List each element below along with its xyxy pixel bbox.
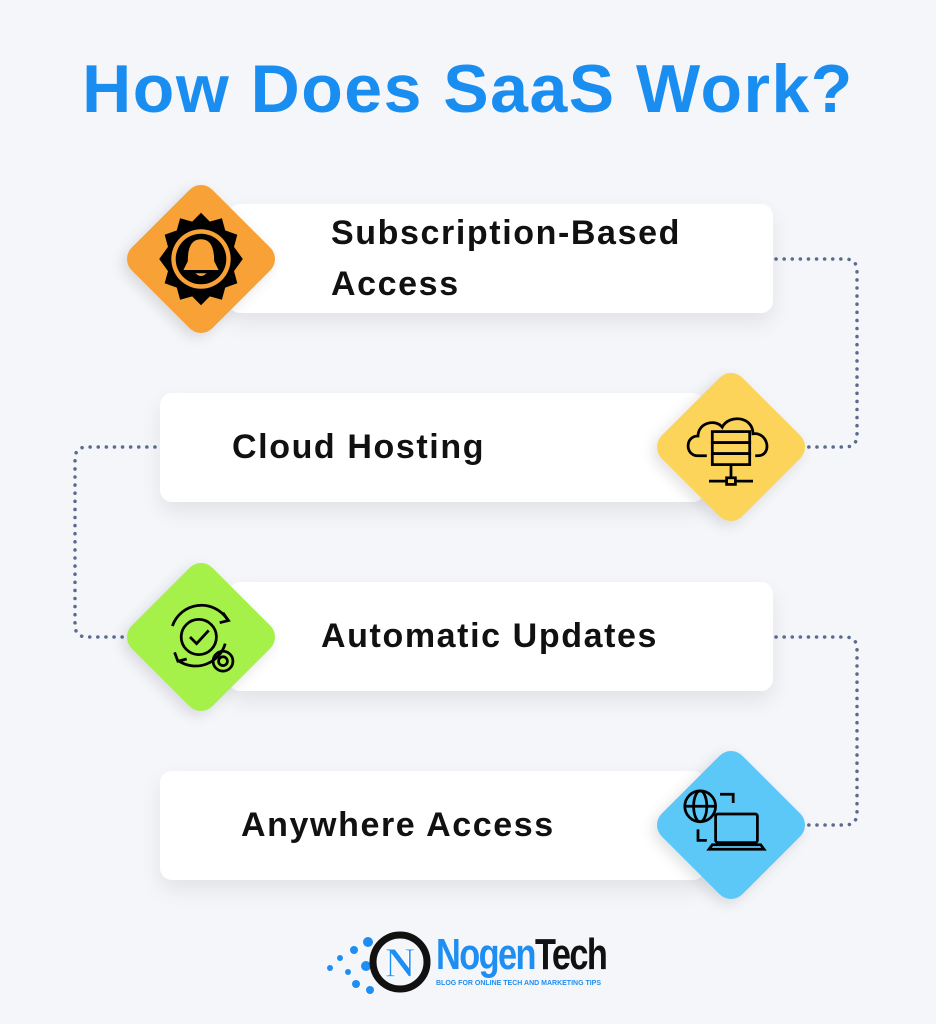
card: cloud hosting xyxy=(160,393,705,502)
logo: NogenTech xyxy=(436,930,606,979)
card: cloud hosting: Cloud Hosting xyxy=(232,428,485,466)
icon: globe laptop diamond xyxy=(650,744,812,906)
logo xyxy=(327,930,606,994)
icon: cloud server diamond xyxy=(650,366,812,528)
icon: update diamond xyxy=(120,556,282,718)
card: subscription xyxy=(228,204,773,313)
card: subscription: Subscription-Based xyxy=(331,214,681,252)
card: automatic updates: Automatic Updates xyxy=(321,617,658,655)
card: subscription: Access xyxy=(331,264,460,302)
logo: BLOG FOR ONLINE TECH AND MARKETING TIPS xyxy=(436,980,601,987)
icon: bell diamond xyxy=(120,178,282,340)
title: How Does SaaS Work? xyxy=(82,51,854,127)
card: anywhere access: Anywhere Access xyxy=(241,806,555,844)
card: anywhere access xyxy=(160,771,705,880)
logo: N xyxy=(385,941,415,987)
card: automatic updates xyxy=(228,582,773,691)
